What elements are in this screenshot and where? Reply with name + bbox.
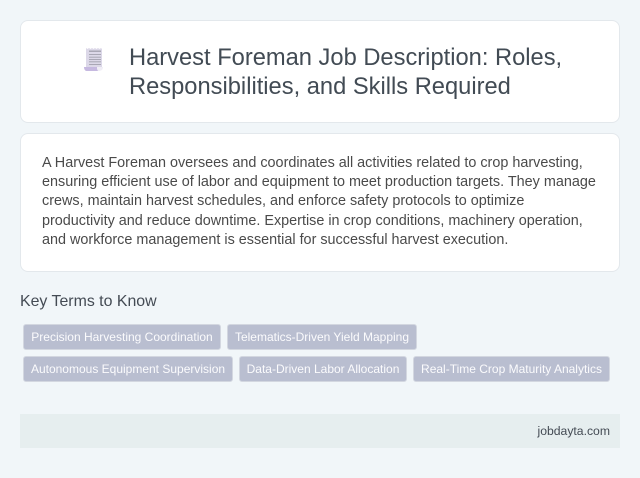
icon: document scroll: [84, 48, 103, 71]
footer bar: [20, 414, 620, 448]
description text: ensuring efficient use of labor and equipment to meet production targets. They manage: [42, 174, 596, 190]
title: [129, 45, 562, 100]
heading: key terms: Key Terms to Know: [20, 293, 157, 310]
tag: [413, 356, 610, 382]
title: Harvest Foreman Job Description: Roles,: [129, 45, 562, 71]
description text: productivity and reduce downtime. Expertise in crop conditions, machinery operation,: [42, 213, 583, 229]
title: Responsibilities, and Skills Required: [129, 74, 511, 100]
tag: Precision Harvesting Coordination: [31, 330, 213, 344]
tag: [23, 324, 221, 350]
tag: [227, 324, 417, 350]
panel: title card: [20, 20, 620, 123]
description text: [42, 155, 596, 248]
tag: [239, 356, 407, 382]
description text: A Harvest Foreman oversees and coordinates all activities related to crop harvesting,: [42, 155, 583, 171]
tag: Autonomous Equipment Supervision: [31, 362, 225, 376]
description text: crews, maintain harvest schedules, and enforce safety protocols to optimize: [42, 193, 524, 209]
tag: [23, 356, 233, 382]
panel: description card: [20, 133, 620, 272]
description text: and workforce management is essential for successful harvest execution.: [42, 232, 508, 248]
footer source text: jobdayta.com: [538, 424, 610, 438]
panel: key term tags: [23, 324, 610, 382]
tag: Real-Time Crop Maturity Analytics: [421, 362, 602, 376]
tag: Telematics-Driven Yield Mapping: [235, 330, 409, 344]
tag: Data-Driven Labor Allocation: [247, 362, 399, 376]
